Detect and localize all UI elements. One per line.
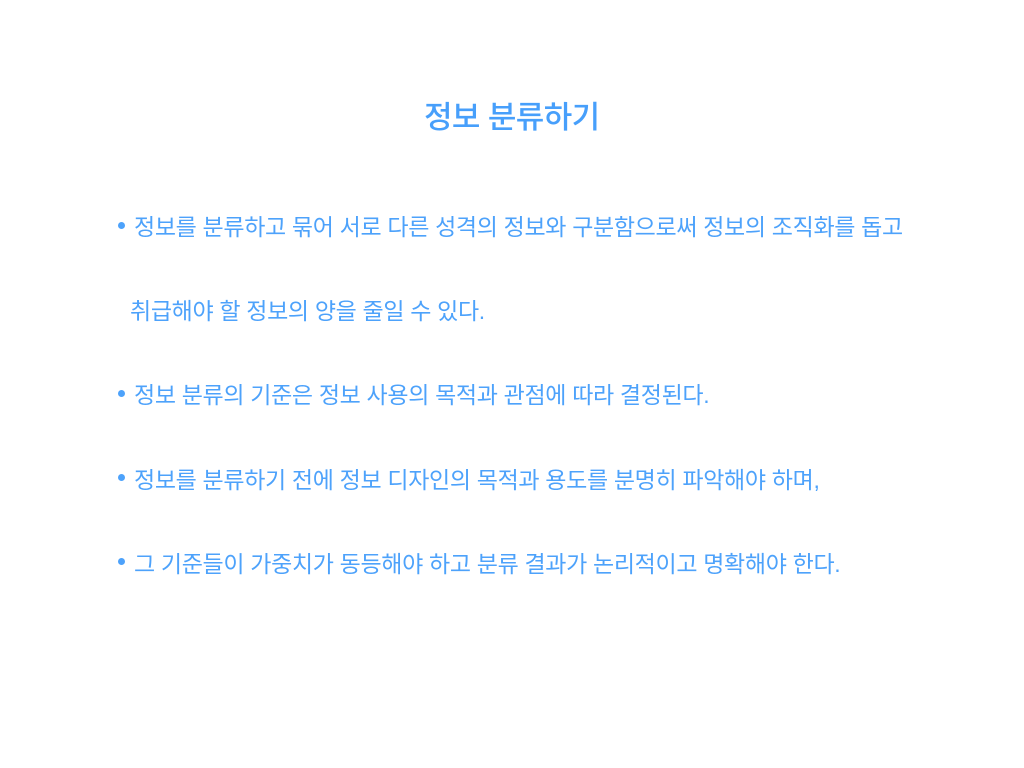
- bullet 1: [118, 222, 124, 229]
- text line 3: 정보 분류의 기준은 정보 사용의 목적과 관점에 따라 결정된다.: [134, 382, 709, 408]
- bullet list: [118, 214, 903, 577]
- bullet 3: [118, 474, 124, 481]
- bullet 2: [118, 390, 124, 397]
- title: 정보 분류하기: [424, 100, 600, 135]
- bullet 4: [118, 558, 124, 565]
- text line 5: 그 기준들이 가중치가 동등해야 하고 분류 결과가 논리적이고 명확해야 한다.: [134, 551, 840, 577]
- text line 2: 취급해야 할 정보의 양을 줄일 수 있다.: [130, 298, 485, 324]
- text line 1: 정보를 분류하고 묶어 서로 다른 성격의 정보와 구분함으로써 정보의 조직화를 돕고: [134, 214, 903, 240]
- text line 4: 정보를 분류하기 전에 정보 디자인의 목적과 용도를 분명히 파악해야 하며,: [134, 467, 820, 493]
